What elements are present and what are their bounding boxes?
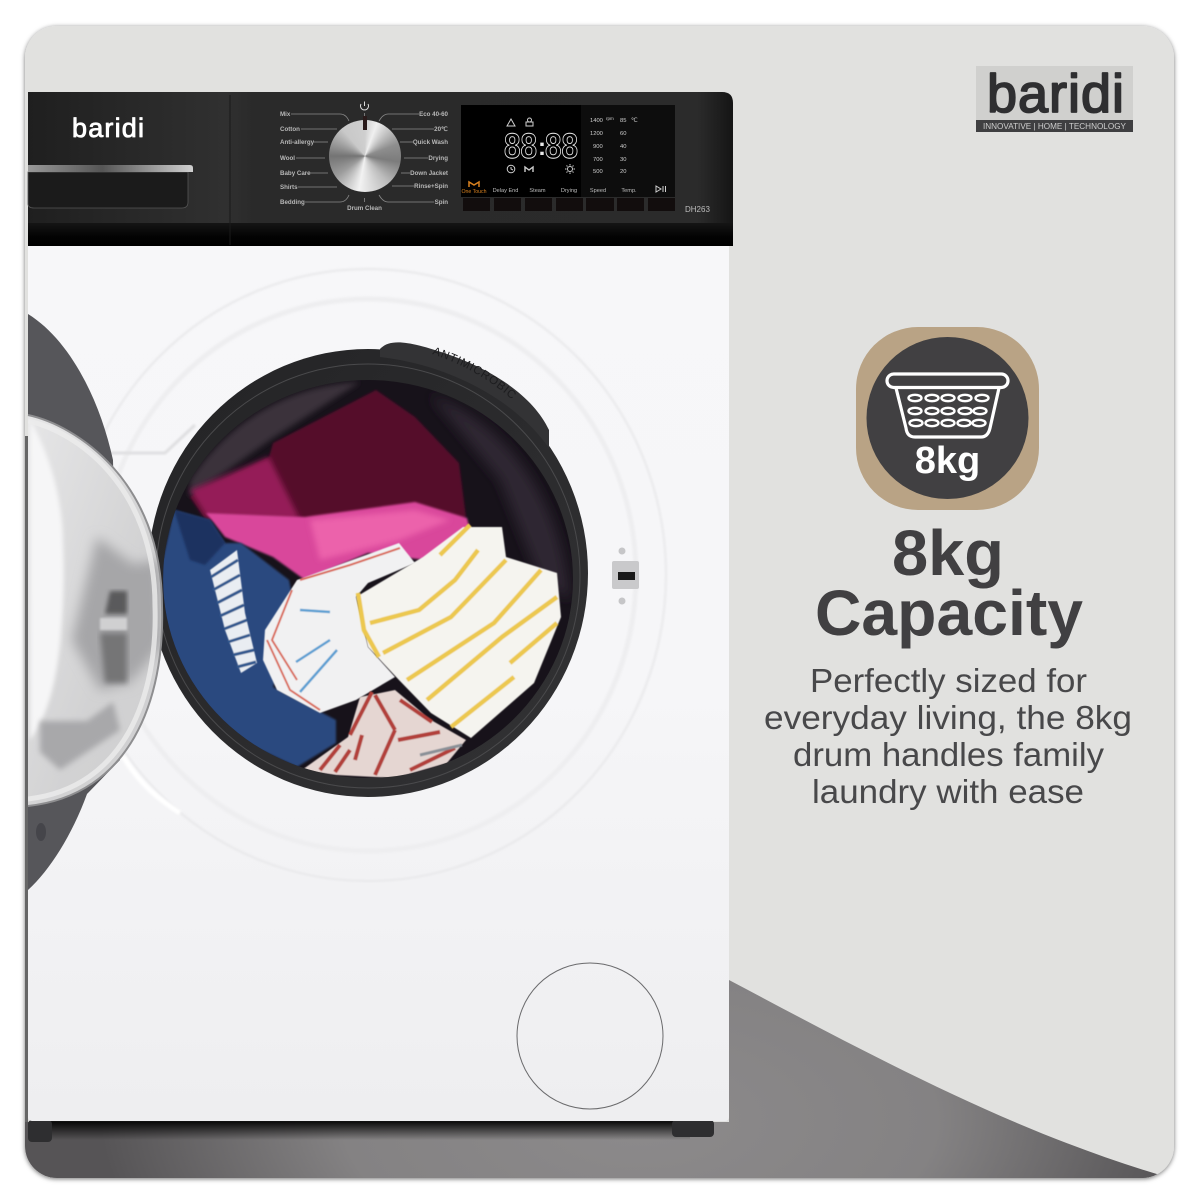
- bright pink cloth: [206, 502, 470, 580]
- program labels left: Mix: [280, 111, 291, 118]
- white cloth with red and blue trim: [263, 543, 415, 713]
- function labels: One Touch: [462, 189, 487, 195]
- basket: [887, 374, 1008, 437]
- dark magenta cloth: [190, 390, 467, 521]
- time digits: :: [538, 134, 546, 161]
- door latch: [612, 548, 639, 604]
- logo wordmark: baridi: [987, 64, 1124, 124]
- heading: 8kg: [892, 517, 1004, 589]
- program labels right: [347, 111, 449, 212]
- logo tagline: INNOVATIVE | HOME | TECHNOLOGY: [983, 122, 1127, 131]
- function labels: [462, 188, 636, 193]
- machine left edge strip: [25, 436, 28, 1122]
- speed and temperature values: ℃: [631, 118, 638, 124]
- program labels right: 20℃: [434, 126, 448, 133]
- heading: [815, 517, 1083, 649]
- red striped cloth: [302, 690, 466, 778]
- display: [461, 105, 675, 211]
- program labels right: Down Jacket: [410, 170, 448, 177]
- badge label: 8kg: [915, 440, 980, 482]
- grey curved floor: [25, 980, 1174, 1178]
- program labels right: Rinse+Spin: [414, 183, 448, 190]
- function labels: Steam: [529, 188, 546, 194]
- door hinge shadow arc: [28, 314, 120, 890]
- panel lower band: [28, 223, 733, 246]
- control knob: [329, 120, 401, 192]
- speed and temperature values: 1200: [590, 131, 603, 137]
- capacity badge icon: [856, 327, 1039, 510]
- function labels: Temp.: [621, 188, 637, 194]
- program labels left: Wool: [280, 155, 295, 162]
- machine feet: [28, 1120, 714, 1142]
- time digits: [504, 132, 578, 159]
- description text: everyday living, the 8kg: [764, 699, 1132, 736]
- detergent drawer: [28, 165, 193, 208]
- speed and temperature values: rpm: [606, 116, 614, 121]
- machine white body: [28, 240, 729, 1121]
- program labels right: Spin: [435, 199, 448, 206]
- control panel: [28, 92, 733, 246]
- power icon: [360, 102, 368, 110]
- under-machine shadow: [50, 1121, 690, 1139]
- model number: DH263: [685, 205, 710, 214]
- glass door: [28, 415, 162, 806]
- speed and temperature values: [590, 116, 638, 175]
- knob connector lines: [291, 113, 434, 202]
- panel logo: baridi: [72, 113, 144, 143]
- program labels left: Baby Care: [280, 170, 311, 177]
- speed and temperature values: 700: [593, 157, 603, 163]
- program labels right: Drum Clean: [347, 205, 382, 212]
- display icons: [507, 118, 575, 174]
- description text: drum handles family: [793, 736, 1105, 773]
- glass inner reflection: [30, 420, 64, 740]
- speed and temperature values: 60: [620, 131, 626, 137]
- speed and temperature values: 1400: [590, 118, 603, 124]
- door gasket: [152, 342, 588, 797]
- door recess rings: [105, 268, 666, 814]
- program labels left: Shirts: [280, 184, 298, 191]
- speed and temperature values: 20: [620, 169, 626, 175]
- panel base: [28, 92, 733, 223]
- program labels right: Drying: [428, 155, 448, 162]
- play pause icon: [656, 186, 666, 192]
- speed and temperature values: 900: [593, 144, 603, 150]
- speed and temperature values: 85: [620, 118, 626, 124]
- drum interior: [160, 375, 580, 785]
- description text: Perfectly sized for: [810, 662, 1087, 699]
- program labels right: Quick Wash: [413, 139, 448, 146]
- time digits: 88: [504, 127, 537, 166]
- speed and temperature values: 40: [620, 144, 626, 150]
- blue striped cloth: [210, 550, 257, 673]
- brand logo: [976, 64, 1133, 132]
- program labels left: Cotton: [280, 126, 300, 133]
- one touch icon: [469, 182, 479, 187]
- antimicrobial text: ANTIMICROBIC: [432, 348, 516, 398]
- speed and temperature values: 30: [620, 157, 626, 163]
- speed and temperature values: 500: [593, 169, 603, 175]
- heading: Capacity: [815, 577, 1083, 649]
- function labels: Delay End: [493, 188, 518, 194]
- filter cap: [517, 963, 663, 1109]
- description text: [764, 662, 1132, 810]
- white cloth with yellow stripes: [356, 525, 561, 738]
- navy cloth: [162, 510, 336, 767]
- time digits: 88: [545, 127, 578, 166]
- program labels right: Eco 40-60: [419, 111, 449, 118]
- drum with laundry: [160, 375, 580, 785]
- washing machine: [25, 92, 733, 1142]
- program labels left: Anti-allergy: [280, 139, 315, 146]
- program labels left: [280, 111, 315, 206]
- touch buttons: [463, 198, 675, 211]
- program labels left: Bedding: [280, 199, 305, 206]
- description text: laundry with ease: [812, 773, 1084, 810]
- function labels: Speed: [590, 188, 606, 194]
- function labels: Drying: [561, 188, 577, 194]
